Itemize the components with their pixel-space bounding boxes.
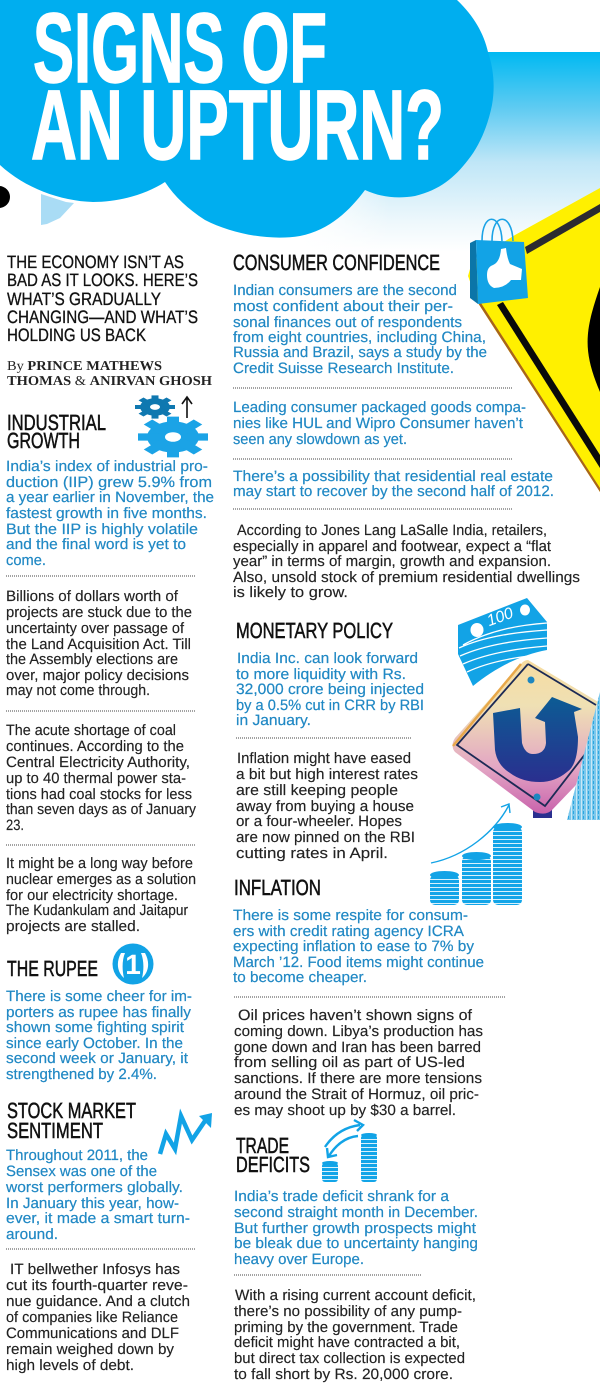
text block: current account (234, 1287, 476, 1383)
text block: deficit shrank: heavy over Europe. (234, 1251, 364, 1268)
intro deck (7, 252, 198, 345)
text block: ICRA (233, 907, 484, 986)
text block: retailers: especially in apparel and footwear, expect a “flat (233, 538, 552, 555)
text block: IIP: But the IIP is highly volatile (6, 521, 198, 538)
heading: trade deficits: TRADE (236, 1133, 289, 1158)
text block: land act: Billions of dollars worth of (6, 588, 179, 605)
text block: liquidity: India Inc. can look forward (237, 650, 418, 667)
icon: gears with up arrow (135, 395, 208, 457)
text block: rupee: since early October. In the (6, 1035, 183, 1052)
heading: trade deficits (236, 1133, 310, 1177)
text block: infosys: nue guidance. And a clutch (6, 1293, 190, 1310)
text block: coal: Central Electricity Authority, (6, 754, 190, 771)
text block: inflation and rates: away from buying a house (236, 798, 414, 815)
byline (7, 358, 213, 388)
text block: current account: priming by the government. Trade (234, 1319, 458, 1336)
panel: industrial growth (6, 410, 214, 935)
text block: confidence: Russia and Brazil, says a study by the (233, 344, 487, 361)
text block: liquidity: by a 0.5% cut in CRR by RBI (236, 697, 424, 714)
text block: inflation and rates: are still keeping people (236, 782, 398, 799)
text block: HUL: seen any slowdown as yet. (233, 431, 407, 448)
panel: the rupee (6, 944, 192, 1083)
text block: coal: continues. According to the (6, 738, 184, 755)
text block: confidence: Indian consumers are the second (233, 282, 457, 299)
text block: land act: may not come through. (6, 682, 150, 699)
byline: THOMAS & ANIRVAN GHOSH (7, 373, 213, 388)
text block: inflation and rates (236, 750, 418, 862)
text block: confidence (233, 282, 487, 377)
panel: trade deficits (234, 1120, 478, 1383)
text block: sensex: In January this year, how- (6, 1195, 179, 1212)
text block: coal (6, 722, 196, 834)
intro deck: BAD AS IT LOOKS. HERE’S (7, 270, 198, 290)
text block: oil prices: coming down. Libya’s production has (234, 1023, 483, 1040)
text block: oil prices: Oil prices haven’t shown signs of (238, 1007, 473, 1024)
text block: HUL (233, 399, 526, 448)
panel: monetary policy (236, 618, 424, 862)
heading: monetary policy: MONETARY POLICY (236, 618, 393, 643)
heading: industrial growth (7, 410, 106, 453)
text block: coal: up to 40 thermal power sta- (6, 770, 186, 787)
text block: ICRA: expecting inflation to ease to 7% by (233, 938, 474, 955)
text block: liquidity (236, 650, 424, 729)
sky background (300, 52, 600, 252)
icon: stack of banknotes (458, 598, 547, 686)
text block: nuclear: for our electricity shortage. (6, 887, 178, 904)
text block: confidence: sonal finances out of respondents (233, 314, 462, 331)
text block: real estate: There’s a possibility that residential real estate (233, 468, 553, 485)
text block: liquidity: 32,000 crore being injected (236, 681, 424, 698)
text block: rupee: shown some fighting spirit (6, 1019, 185, 1036)
text block: oil prices: gone down and Iran has been barred (234, 1039, 481, 1056)
text block: coal: The acute shortage of coal (6, 722, 176, 739)
text block: deficit shrank: second straight month in December. (234, 1204, 478, 1221)
heading: stock market sentiment: SENTIMENT (7, 1118, 103, 1143)
heading: the rupee: THE RUPEE (7, 956, 98, 981)
text block: current account: With a rising current account deficit, (235, 1287, 476, 1304)
icon: rupee coin: 1 (125, 949, 141, 980)
text block: oil prices: from selling oil as part of US-led (234, 1054, 465, 1071)
text block: infosys: cut its fourth-quarter reve- (6, 1277, 188, 1294)
text block: sensex (5, 1147, 190, 1243)
panel: consumer confidence (233, 250, 580, 601)
heading: industrial growth: GROWTH (7, 428, 80, 453)
text block: infosys (6, 1261, 190, 1374)
text block: infosys: high levels of debt. (6, 1357, 134, 1374)
text block: IIP: fastest growth in five months. (6, 505, 207, 522)
icon: stack of banknotes: 100 (485, 605, 516, 630)
text block: oil prices (234, 1007, 483, 1119)
text block: HUL: nies like HUL and Wipro Consumer haven’t (233, 415, 524, 432)
icon: shopping bag with thumbs up (470, 219, 528, 304)
text block: nuclear: The Kudankulam and Jaitapur (6, 902, 188, 919)
text block: IIP: and the final word is yet to (6, 536, 186, 553)
text block: retailers (233, 522, 580, 601)
intro deck: THE ECONOMY ISN’T AS (7, 252, 184, 272)
road sign: yellow (468, 188, 600, 492)
text block: retailers: year” in terms of margin, growth and expansion. (233, 553, 551, 570)
text block: retailers: Also, unsold stock of premium residential dwellings (233, 569, 580, 586)
intro deck: WHAT’S GRADUALLY (7, 289, 161, 309)
heading: inflation: INFLATION (234, 875, 321, 900)
text block: sensex: Throughout 2011, the (6, 1147, 148, 1164)
text block: IIP: duction (IIP) grew 5.9% from (6, 474, 212, 491)
text block: rupee: There is some cheer for im- (6, 988, 192, 1005)
text block: current account: to fall short by Rs. 20,000 crore. (234, 1366, 453, 1383)
icon: rupee coin (112, 944, 154, 984)
text block: inflation and rates: or a four-wheeler. Hopes (236, 813, 402, 830)
text block: land act: uncertainty over passage of (6, 620, 185, 637)
title (31, 0, 444, 180)
text block: ICRA: ers with credit rating agency ICRA (233, 923, 464, 940)
text block: liquidity: in January. (236, 712, 311, 729)
text block: liquidity: to more liquidity with Rs. (236, 666, 406, 683)
text block: nuclear (6, 855, 196, 935)
text block: sensex: Sensex was one of the (6, 1163, 157, 1180)
text block: deficit shrank: But further growth prospects might (234, 1220, 477, 1237)
heading: stock market sentiment: STOCK MARKET (7, 1098, 136, 1123)
text block: oil prices: sanctions. If there are more tensions (234, 1070, 482, 1087)
text block: sensex: around. (6, 1226, 58, 1243)
text block: inflation and rates: cutting rates in April. (236, 845, 388, 862)
icon: zigzag arrow (160, 1113, 212, 1154)
text block: rupee: strengthened by 2.4%. (6, 1066, 157, 1083)
icon: U-turn road sign (452, 660, 600, 818)
icon: coin stacks with exchange arrows (322, 1120, 377, 1182)
heading: industrial growth: INDUSTRIAL (7, 410, 106, 435)
text block: land act: projects are stuck due to the (6, 604, 192, 621)
text block: deficit shrank: be bleak due to uncertainty hanging (234, 1235, 478, 1252)
text block: infosys: Communications and DLF (6, 1325, 179, 1342)
text block: oil prices: around the Strait of Hormuz, oil pric- (234, 1086, 479, 1103)
text block: real estate: may start to recover by the second half of 2012. (233, 483, 554, 500)
text block: land act: over, major policy decisions (6, 667, 189, 684)
text block: rupee: porters as rupee has finally (6, 1004, 191, 1021)
text block: inflation and rates: Inflation might have eased (237, 750, 411, 767)
text block: sensex: worst performers globally. (5, 1179, 183, 1196)
text block: land act: the Assembly elections are (6, 651, 178, 668)
byline: By PRINCE MATHEWS (7, 358, 162, 373)
text block: confidence: most confident about their per- (233, 298, 453, 315)
text block: nuclear: nuclear emerges as a solution (6, 871, 196, 888)
text block: confidence: Credit Suisse Research Institute. (233, 360, 454, 377)
text block: inflation and rates: are now pinned on the RBI (236, 829, 415, 846)
heading: trade deficits: DEFICITS (236, 1152, 310, 1177)
text block: rupee: second week or January, it (6, 1050, 189, 1067)
text block: IIP: India’s index of industrial pro- (6, 458, 208, 475)
heading: consumer confidence: CONSUMER CONFIDENCE (233, 250, 440, 275)
text block: nuclear: It might be a long way before (6, 855, 193, 872)
intro deck: CHANGING—AND WHAT’S (7, 307, 198, 327)
text block: retailers: According to Jones Lang LaSalle India, retailers, (237, 522, 547, 539)
text block: rupee (6, 988, 192, 1083)
heading: stock market sentiment (7, 1098, 136, 1143)
panel: stock market sentiment (5, 1098, 212, 1374)
text block: sensex: ever, it made a smart turn- (6, 1210, 190, 1227)
cloud (0, 0, 494, 238)
text block: inflation and rates: a bit but high interest rates (236, 766, 418, 783)
text block: current account: there’s no possibility of any pump- (234, 1303, 462, 1320)
text block: IIP (6, 458, 214, 569)
text block: confidence: from eight countries, including China, (233, 329, 486, 346)
text block: retailers: is likely to grow. (233, 584, 348, 601)
text block: infosys: remain weighed down by (6, 1341, 174, 1358)
intro deck: HOLDING US BACK (7, 325, 146, 345)
cloud shadow triangle (41, 194, 74, 225)
text block: infosys: of companies like Reliance (6, 1309, 178, 1326)
text block: nuclear: projects are stalled. (6, 918, 140, 935)
text block: coal: tions had coal stocks for less (6, 786, 192, 803)
panel: inflation (233, 875, 505, 1119)
text block: coal: 23. (6, 817, 24, 834)
ice texture (567, 692, 600, 820)
text block: ICRA: March ’12. Food items might continue (233, 954, 484, 971)
text block: coal: than seven days as of January (6, 801, 196, 818)
text block: ICRA: to become cheaper. (233, 969, 367, 986)
text block: deficit shrank: India’s trade deficit shrank for a (234, 1188, 450, 1205)
text block: oil prices: es may shoot up by $30 a barrel. (234, 1102, 456, 1119)
text block: ICRA: There is some respite for consum- (233, 907, 468, 924)
black dot (0, 186, 10, 208)
text block: real estate (233, 468, 554, 500)
text block: HUL: Leading consumer packaged goods compa- (233, 399, 526, 416)
text block: land act (6, 588, 192, 699)
text block: IIP: come. (6, 552, 46, 569)
text block: deficit shrank (234, 1188, 478, 1268)
icon: rising coin stacks with arrow (430, 804, 522, 905)
text block: infosys: IT bellwether Infosys has (10, 1261, 180, 1278)
text block: current account: but direct tax collection is expected (234, 1350, 465, 1367)
text block: land act: the Land Acquisition Act. Till (6, 636, 191, 653)
text block: IIP: a year earlier in November, the (6, 489, 214, 506)
text block: current account: deficit might have contracted a bit, (234, 1334, 460, 1351)
